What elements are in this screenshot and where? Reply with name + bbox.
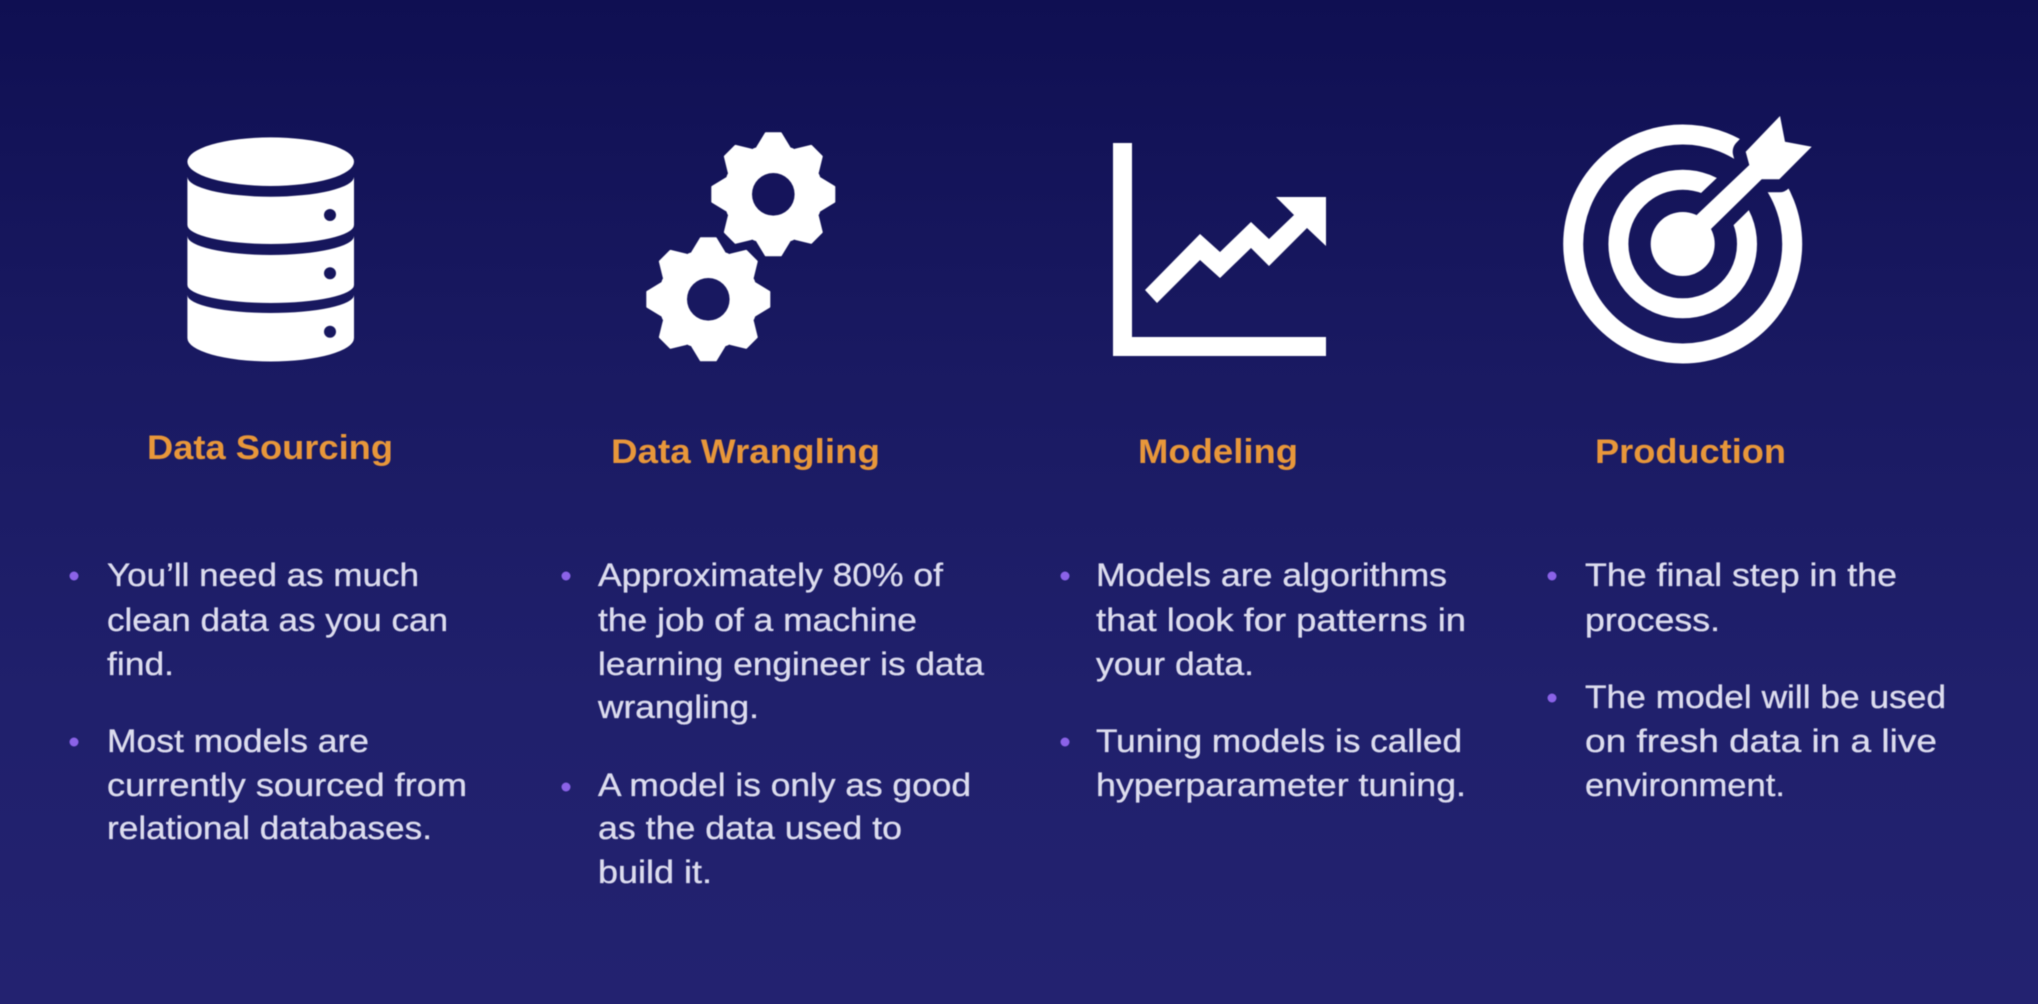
text block: production bullets: The final step in the xyxy=(1585,557,1897,593)
heading: data wrangling: Data Wrangling xyxy=(611,433,880,471)
text block: production bullets: The model will be used xyxy=(1585,679,1946,715)
heading: data sourcing: Data Sourcing xyxy=(147,429,393,467)
heading: production: Production xyxy=(1595,433,1786,471)
text block: production bullets: on fresh data in a live xyxy=(1585,723,1937,759)
text block: data wrangling bullets: the job of a machine xyxy=(598,602,917,638)
text block: data sourcing bullets: relational databases. xyxy=(107,810,432,846)
text block: modeling bullets: Tuning models is called xyxy=(1096,723,1462,759)
text block: data sourcing bullets: clean data as you can xyxy=(107,602,448,638)
text block: modeling bullets: hyperparameter tuning. xyxy=(1096,767,1466,803)
text block: data sourcing bullets: currently sourced from xyxy=(107,767,467,803)
text block: data wrangling bullets: learning engineer is data xyxy=(598,646,984,682)
text block: data sourcing bullets: You’ll need as much xyxy=(107,557,419,593)
icon: lower gear xyxy=(647,238,769,360)
text block: modeling bullets xyxy=(1060,557,1466,803)
text block: data sourcing bullets: Most models are xyxy=(107,723,369,759)
icon: target with arrow xyxy=(1573,116,1812,354)
text block: modeling bullets: your data. xyxy=(1096,646,1254,682)
icon: database xyxy=(187,137,354,362)
text block: data wrangling bullets: Approximately 80% of xyxy=(598,557,943,593)
text block: production bullets xyxy=(1548,557,1946,803)
text block: data sourcing bullets xyxy=(70,557,467,846)
text block: modeling bullets: that look for patterns in xyxy=(1096,602,1466,638)
icon: upper gear xyxy=(712,133,834,255)
text block: data wrangling bullets: wrangling. xyxy=(597,689,759,725)
heading: modeling: Modeling xyxy=(1138,433,1298,471)
panel: production xyxy=(1548,116,1946,803)
text block: production bullets: environment. xyxy=(1585,767,1785,803)
text block: modeling bullets: Models are algorithms xyxy=(1096,557,1447,593)
text block: data wrangling bullets: A model is only as good xyxy=(598,767,971,803)
text block: data wrangling bullets xyxy=(562,557,984,890)
text block: data wrangling bullets: build it. xyxy=(598,854,712,890)
text block: production bullets: process. xyxy=(1585,602,1720,638)
icon: growth chart xyxy=(1113,143,1326,356)
text block: data sourcing bullets: find. xyxy=(107,646,174,682)
icon: gears xyxy=(647,133,834,360)
panel: modeling xyxy=(1060,143,1466,803)
panel: data sourcing xyxy=(70,137,467,846)
panel: data wrangling xyxy=(562,133,984,890)
text block: data wrangling bullets: as the data used to xyxy=(598,810,902,846)
